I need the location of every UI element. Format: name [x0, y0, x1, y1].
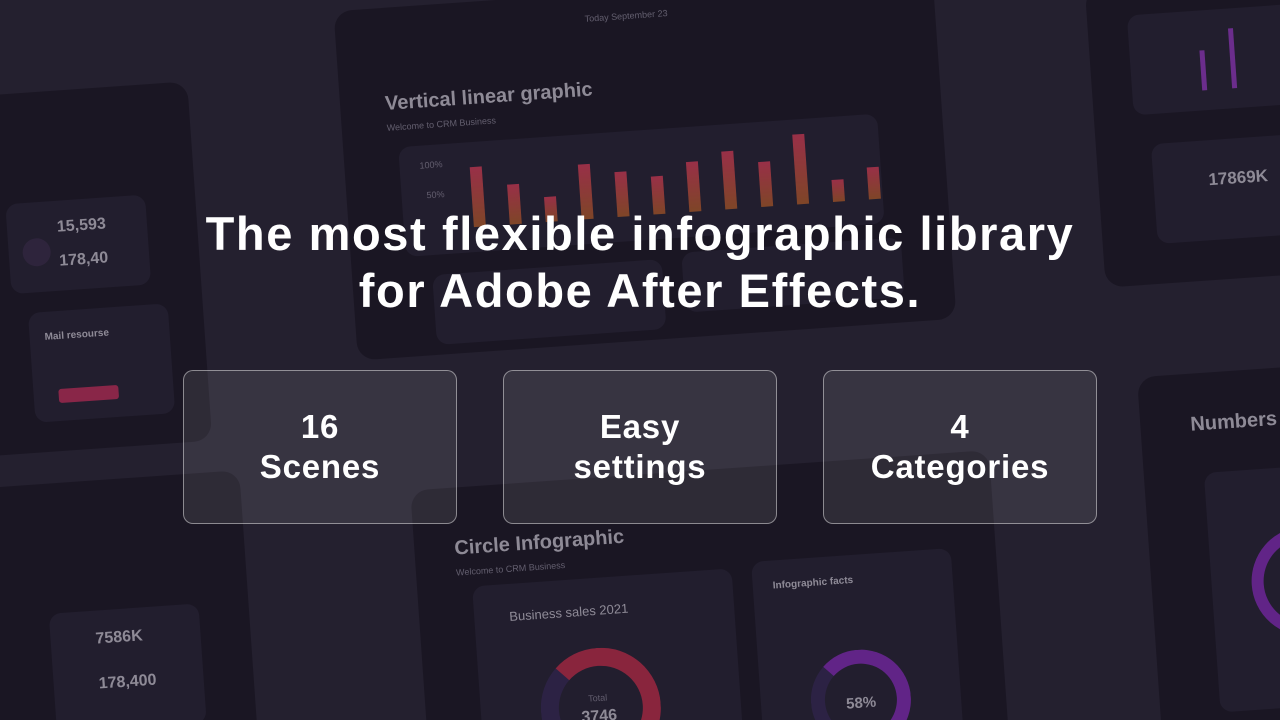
- donut 58: [811, 650, 911, 720]
- card: scenes: Scenes: [260, 448, 380, 485]
- title: for Adobe After Effects.: [359, 264, 921, 317]
- panel: left bottom: 178,400: [98, 672, 157, 693]
- panel: vertical linear graphic: Welcome to CRM Business: [386, 115, 496, 133]
- panel: left bottom: 7586K: [95, 627, 143, 648]
- card: categories: Categories: [871, 448, 1049, 485]
- panel: left stats: [0, 81, 212, 459]
- panel: right top: 17869K: [1208, 166, 1269, 189]
- panel: vertical linear graphic: Vertical linear graphic: [384, 79, 593, 115]
- panel: circle infographic: Total: [588, 692, 608, 704]
- card: scenes: [183, 370, 457, 524]
- panel: right bottom: [1137, 363, 1280, 720]
- panel: circle infographic: [410, 450, 1010, 720]
- panel: left bottom: [0, 470, 260, 720]
- panel: left stats: Mail resourse: [44, 327, 109, 343]
- panel: right top: [1085, 0, 1280, 288]
- panel: circle infographic: 58%: [846, 694, 877, 713]
- title: The most flexible infographic library: [206, 207, 1074, 260]
- bar chart: [398, 114, 885, 257]
- panel: circle infographic: Circle Infographic: [454, 526, 625, 560]
- panel: circle infographic: Welcome to CRM Business: [456, 560, 566, 578]
- panel: vertical linear graphic: [334, 0, 956, 361]
- panel: circle infographic: Infographic facts: [772, 575, 854, 592]
- panel: left stats: 178,40: [59, 249, 109, 270]
- bar chart: 50%: [426, 189, 445, 200]
- panel: right bottom: Numbers: [1190, 408, 1278, 436]
- card: settings: Easy: [600, 408, 680, 445]
- bar chart: 100%: [419, 159, 443, 171]
- panel: vertical linear graphic: Today September 23: [584, 8, 668, 24]
- panel: circle infographic: Business sales 2021: [509, 601, 629, 624]
- card: scenes: 16: [301, 408, 339, 445]
- panel: left stats: 15,593: [56, 215, 106, 236]
- title: [206, 207, 1074, 317]
- card: categories: [823, 370, 1097, 524]
- card: settings: settings: [574, 448, 706, 485]
- card: categories: 4: [950, 408, 970, 445]
- donut total: [541, 648, 661, 720]
- card: settings: [503, 370, 777, 524]
